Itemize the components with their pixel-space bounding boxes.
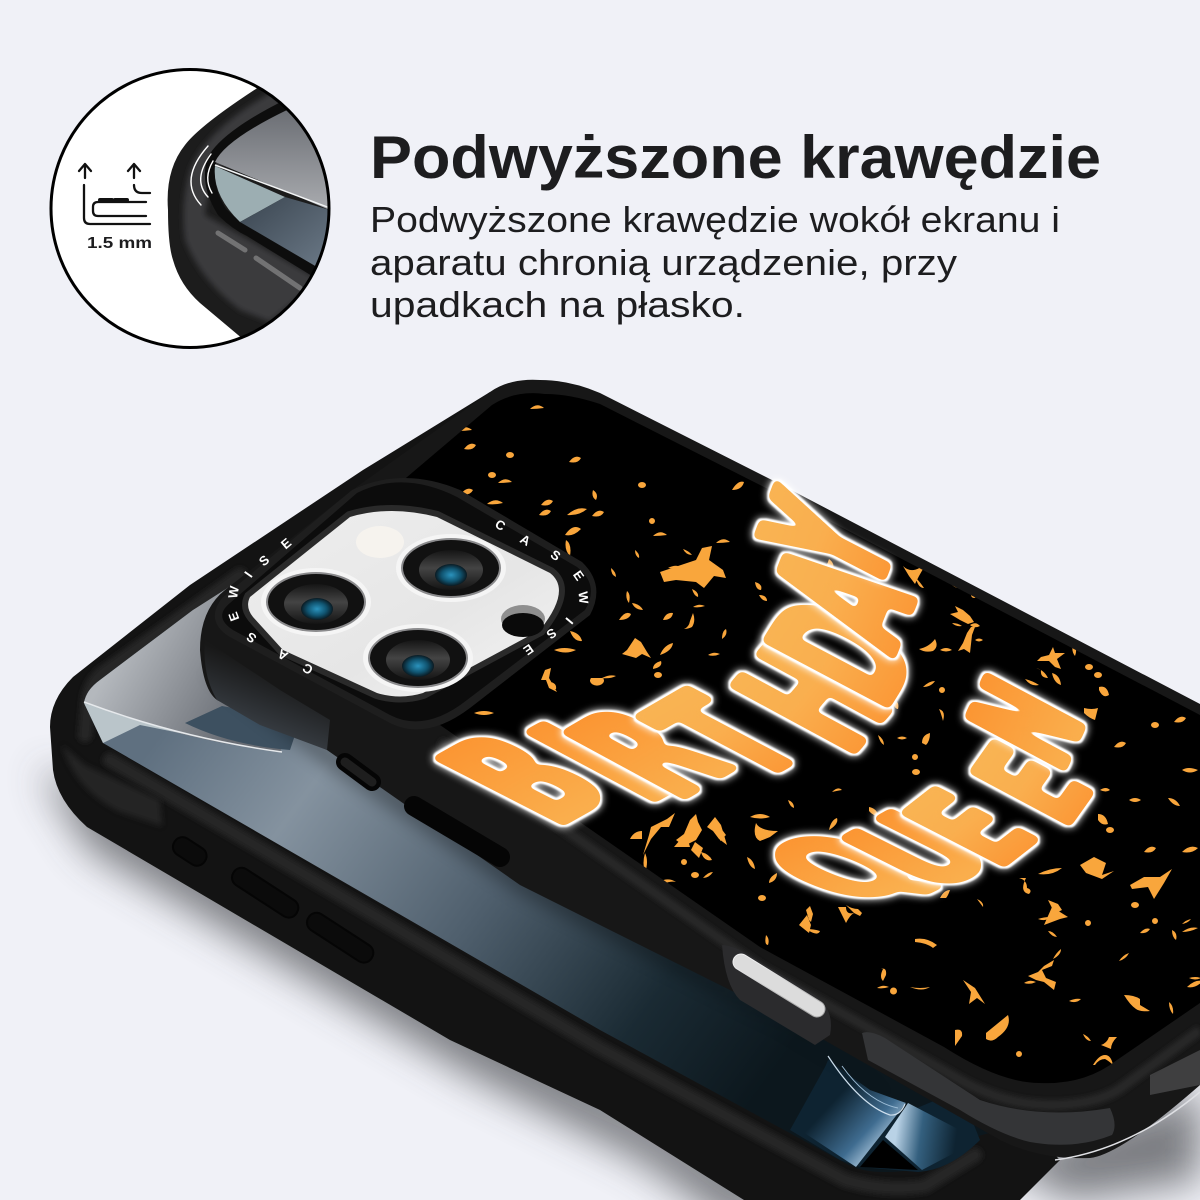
back case inner rim xyxy=(85,575,975,1188)
white lower rim xyxy=(1055,1092,1200,1160)
CASEWISE ring lettering: E xyxy=(570,568,588,584)
CASEWISE ring lettering: E xyxy=(225,610,242,623)
CASEWISE ring lettering: A xyxy=(517,531,534,549)
right edge grille xyxy=(1150,1050,1200,1095)
case corner close-up xyxy=(168,88,328,336)
camera window xyxy=(248,511,559,696)
screen dark slate wedge xyxy=(185,706,300,750)
CASEWISE ring lettering xyxy=(225,516,592,678)
inset circle: raised edge close-up xyxy=(51,70,340,348)
CASEWISE ring lettering: I xyxy=(563,615,576,627)
back phone buttons xyxy=(169,834,377,966)
microphone hole xyxy=(501,605,545,637)
close-up pale panel xyxy=(215,166,285,222)
icon: raised edges diagram xyxy=(79,164,150,224)
description text: upadkach na płasko. xyxy=(370,284,745,325)
CASEWISE ring lettering: E xyxy=(278,535,295,552)
front phone case xyxy=(200,380,1200,1160)
lettering: BIRTHDAY: B xyxy=(392,709,661,849)
lens 3 xyxy=(363,624,473,692)
lettering: BIRTHDAY: T xyxy=(602,669,852,804)
heading: Podwyższone krawędzie xyxy=(370,124,1101,191)
lettering: BIRTHDAY: D xyxy=(727,569,963,735)
lens 1 xyxy=(261,568,371,636)
CASEWISE ring lettering: A xyxy=(274,646,291,664)
screen gray reflection xyxy=(84,580,300,752)
lettering: BIRTHDAY: H xyxy=(693,619,937,781)
camera ring xyxy=(222,482,591,721)
close-up dark screen xyxy=(240,197,330,270)
camera ring outer base xyxy=(215,478,596,729)
close-up screen gray xyxy=(215,110,330,210)
case dark rim xyxy=(210,103,320,275)
CASEWISE ring lettering: S xyxy=(548,547,564,564)
circle background xyxy=(51,70,329,348)
soft shadow under phones xyxy=(40,770,1200,1200)
raised edge arcs xyxy=(191,146,213,205)
lettering: QUEEN xyxy=(725,654,1128,921)
lettering: BIRTHDAY: Y xyxy=(722,464,937,620)
lettering: BIRTHDAY xyxy=(392,464,963,849)
lettering: BIRTHDAY: I xyxy=(485,700,722,828)
translucent corner grip bottom xyxy=(862,1032,1115,1145)
CASEWISE ring lettering: C xyxy=(492,516,509,534)
back panel xyxy=(380,393,1200,1083)
camera window bevel xyxy=(248,511,559,696)
CASEWISE ring lettering: I xyxy=(241,569,255,580)
CASEWISE ring lettering: S xyxy=(543,625,559,643)
lettering: QUEEN: U xyxy=(808,793,1034,910)
lettering: BIRTHDAY: A xyxy=(736,516,957,679)
lettering: QUEEN: E xyxy=(869,769,1076,887)
CASEWISE ring lettering: S xyxy=(243,629,259,646)
CASEWISE ring lettering: C xyxy=(299,660,316,678)
CASEWISE ring lettering: W xyxy=(575,591,592,605)
case inner lighter band xyxy=(183,92,320,322)
front case band xyxy=(200,380,1200,1158)
shadow of front phone xyxy=(200,670,980,1150)
screen pale wedge xyxy=(84,703,282,752)
lettering: QUEEN: N xyxy=(938,654,1120,793)
back phone case xyxy=(50,392,1060,1200)
back screen xyxy=(84,500,1000,1172)
lettering: QUEEN: Q xyxy=(725,815,964,921)
orange confetti pattern xyxy=(385,405,1200,1065)
description text: aparatu chronią urządzenie, przy xyxy=(370,242,957,283)
back case band xyxy=(50,392,1060,1200)
case corner body xyxy=(168,88,328,336)
charging port xyxy=(722,945,831,1045)
description text: Podwyższone krawędzie wokół ekranu i xyxy=(370,199,1060,240)
reflection line xyxy=(215,165,330,208)
circle outline xyxy=(51,70,329,348)
flash xyxy=(356,526,404,558)
band highlight xyxy=(440,742,1200,1105)
blue light rays xyxy=(790,1056,980,1172)
translucent corner grip near camera xyxy=(204,640,330,750)
camera module xyxy=(215,478,596,729)
lettering: QUEEN: E xyxy=(942,722,1128,847)
label 1.5 mm: 1.5 mm xyxy=(87,235,152,252)
CASEWISE ring lettering: W xyxy=(225,584,242,600)
CASEWISE ring lettering: E xyxy=(520,641,536,659)
lens 2 xyxy=(396,534,506,602)
highlight strips xyxy=(218,233,300,288)
description text xyxy=(370,199,1060,325)
front side buttons xyxy=(345,762,500,857)
lettering: BIRTHDAY: R xyxy=(524,683,777,823)
reflection line xyxy=(84,702,282,752)
CASEWISE ring lettering: S xyxy=(256,552,273,569)
back corner translucent grip xyxy=(62,745,162,826)
